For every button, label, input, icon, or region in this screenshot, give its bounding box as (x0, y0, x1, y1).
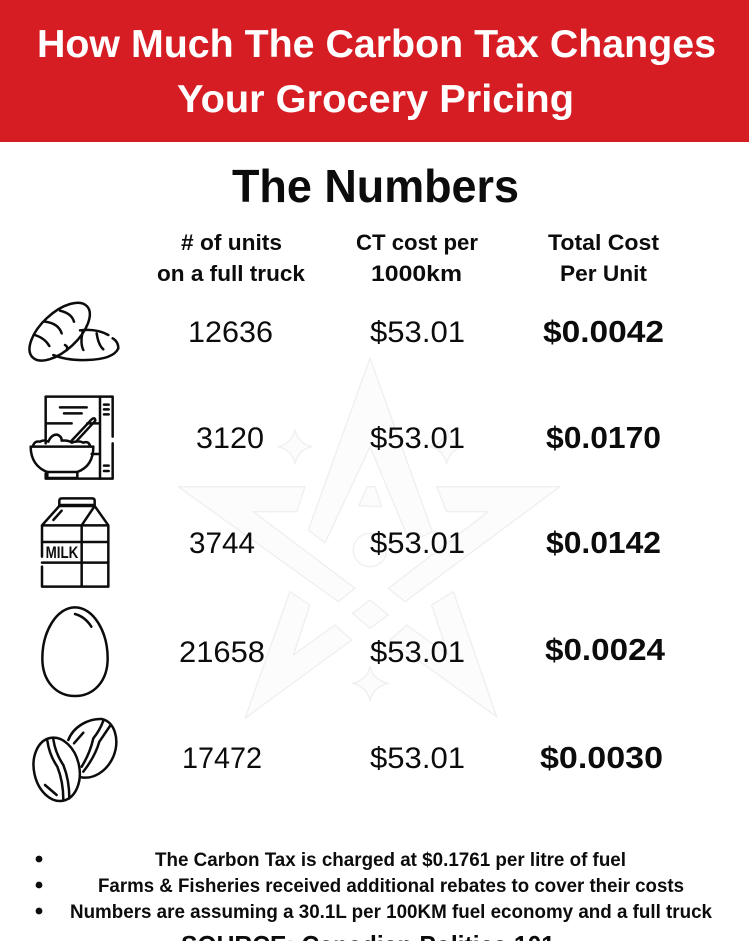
row: coffee (182, 740, 663, 775)
row: coffee: $53.01 (370, 742, 465, 775)
icon: coffee beans (28, 719, 116, 805)
row: cereal: $53.01 (370, 422, 465, 455)
row: milk: $53.01 (370, 527, 465, 560)
column heading: total cost (548, 230, 660, 286)
title: How Much The Carbon Tax Changes (37, 23, 716, 66)
bullet notes: Farms & Fisheries received additional rebates to cover their costs (98, 875, 684, 897)
column heading: units: on a full truck (157, 261, 306, 286)
icon: cereal (31, 397, 113, 479)
row: bread: $53.01 (370, 316, 465, 349)
icon: milk carton: MILK (46, 543, 78, 562)
watermark star logo (178, 358, 560, 718)
column heading: total cost: Total Cost (548, 230, 660, 255)
header banner (0, 0, 749, 142)
column heading: carbon tax cost: CT cost per (356, 230, 478, 255)
icon: milk carton (42, 498, 108, 587)
bullet notes (36, 849, 712, 923)
row: cereal: $0.0170 (546, 420, 661, 455)
icon: egg (42, 607, 108, 696)
row: milk: 3744 (189, 527, 255, 560)
row: bread (188, 314, 664, 349)
column heading: units (157, 230, 306, 286)
bullet notes: Numbers are assuming a 30.1L per 100KM fuel economy and a full truck (70, 901, 712, 923)
row: coffee: 17472 (182, 742, 262, 775)
title: Your Grocery Pricing (177, 78, 574, 121)
title (37, 23, 716, 121)
row: bread: $0.0042 (543, 314, 664, 349)
bullet notes: The Carbon Tax is charged at $0.1761 per litre of fuel (155, 849, 626, 871)
row: egg: 21658 (179, 636, 265, 669)
column heading: carbon tax cost: 1000km (371, 261, 462, 286)
row: milk: $0.0142 (546, 525, 661, 560)
row: cereal (196, 420, 661, 455)
row: egg: $53.01 (370, 636, 465, 669)
row: cereal: 3120 (196, 422, 264, 455)
row: egg (179, 632, 666, 669)
column heading: total cost: Per Unit (560, 261, 648, 286)
column heading: carbon tax cost (356, 230, 478, 286)
section heading: The Numbers (232, 160, 519, 212)
row: coffee: $0.0030 (540, 740, 663, 775)
row: egg: $0.0024 (545, 632, 666, 667)
column heading: units: # of units (181, 230, 282, 255)
row: bread: 12636 (188, 316, 273, 349)
icon: bread (20, 293, 118, 371)
row: milk (189, 525, 661, 560)
